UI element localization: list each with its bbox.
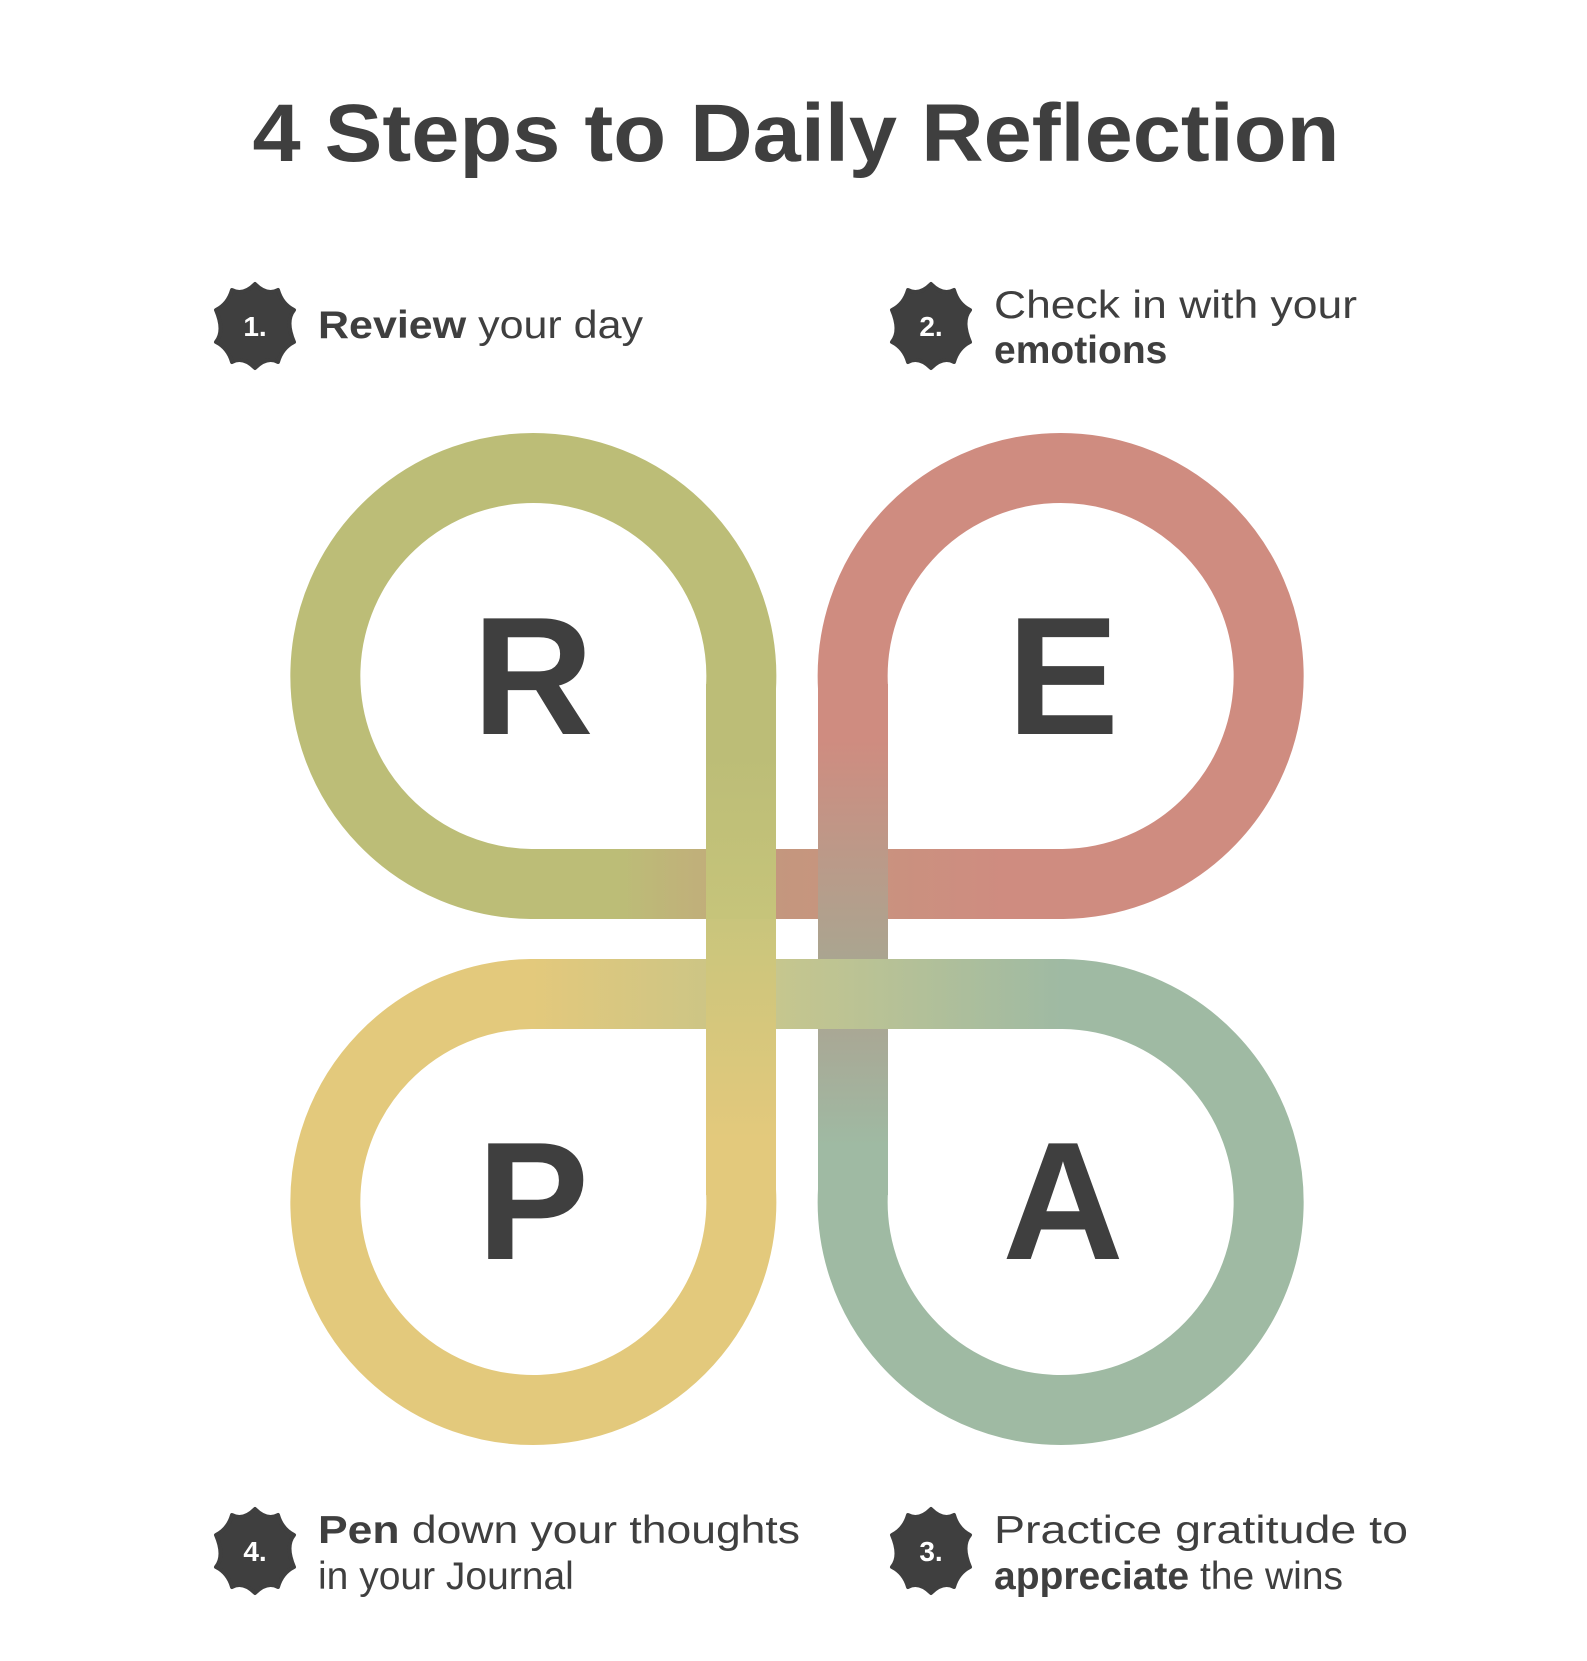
diagram: REPA loops	[325, 468, 1269, 1410]
step 1	[216, 284, 644, 368]
text: step 4: in your Journal	[318, 1555, 574, 1598]
text: step 2: Check in with your	[994, 284, 1357, 327]
icon: badge 2	[892, 284, 970, 368]
loop: A: A	[1002, 1107, 1124, 1295]
icon: badge 3	[892, 1509, 970, 1593]
icon: badge 2: 2.	[919, 311, 943, 342]
icon: badge 4: 4.	[243, 1536, 267, 1567]
step 2	[892, 284, 1357, 372]
text: step 1: Review your day	[318, 304, 644, 347]
title: 4 Steps to Daily Reflection	[252, 88, 1340, 179]
text: step 2: emotions	[994, 329, 1167, 372]
step 4	[216, 1509, 800, 1598]
step 3	[892, 1509, 1408, 1598]
icon: badge 1: 1.	[243, 311, 267, 342]
text: step 4: Pen down your thoughts	[318, 1509, 751, 1552]
text: step 3: appreciate the wins	[994, 1555, 1343, 1598]
loop: E	[776, 468, 1269, 959]
loop: A	[776, 959, 1269, 1410]
icon: badge 3: 3.	[919, 1536, 943, 1567]
loop: E: E	[1007, 582, 1119, 770]
loop: R	[325, 468, 817, 919]
loop: R: R	[472, 582, 594, 770]
icon: badge 4	[216, 1509, 294, 1593]
icon: badge 1	[216, 284, 294, 368]
loop: P: P	[477, 1107, 589, 1295]
text: step 3: Practice gratitude to	[994, 1509, 1408, 1552]
loop: P	[325, 919, 776, 1410]
